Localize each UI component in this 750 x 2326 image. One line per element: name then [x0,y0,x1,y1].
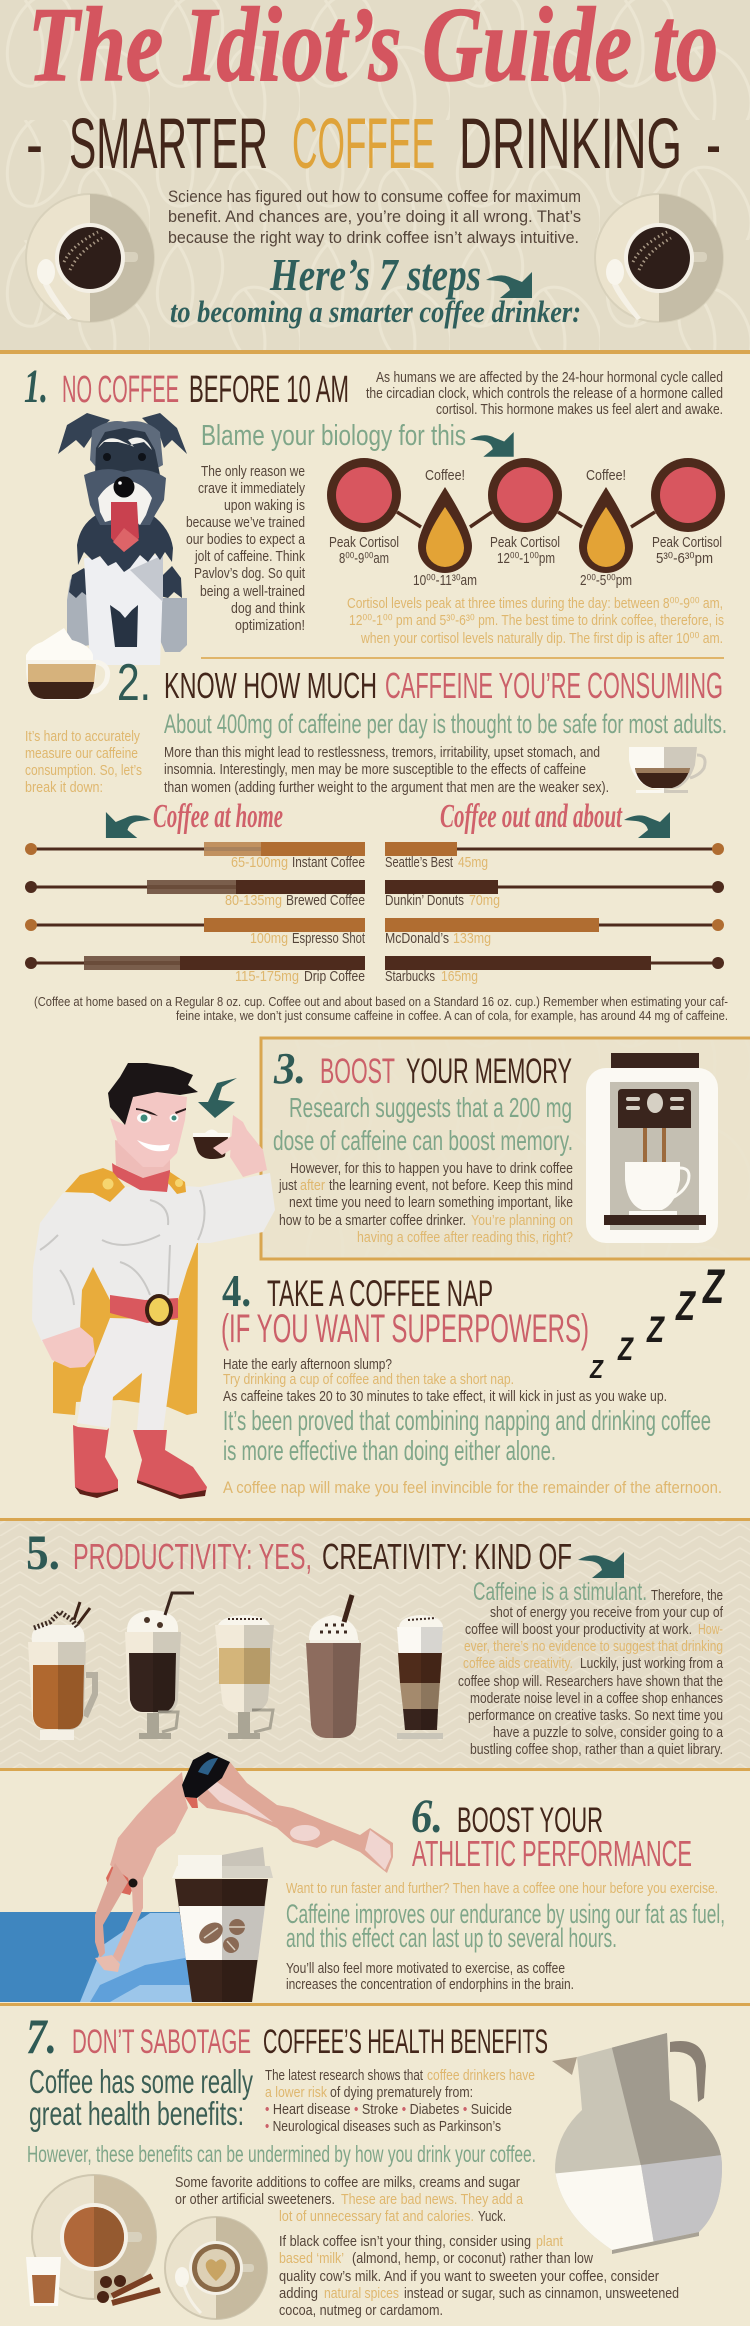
text: alternatives: instead or sugar, such as cinnamon, unsweetened [404,2285,679,2302]
text: side effects: than women (adding further weight to the argument that men are the weaker sex). [164,779,609,796]
text: measure note: It’s hard to accurately [25,728,140,745]
chart: coffee out and about bars: Starbucks [385,968,435,985]
text: alternatives: plant [536,2233,564,2250]
subheading: health benefits: Coffee has some really [29,2063,253,2100]
text: pavlov: optimization! [235,617,305,634]
text: pavlov: upon waking is [224,497,305,514]
text: additions: or other artificial sweeteners. [175,2191,335,2208]
icon: arrow [578,1552,624,1578]
heading: step 4: 4. [222,1265,251,1316]
icon: saucer with heart latte [165,2217,267,2319]
chart: coffee out and about bars: Seattle’s Best [385,854,454,871]
subheading: nap research: is more effective than doing either alone. [223,1435,556,1466]
heading: step 5: PRODUCTIVITY: YES, [73,1536,312,1577]
text: memory body [278,1160,573,1246]
heading: step 1: NO COFFEE [62,369,179,411]
heading: step 7 [26,2008,548,2064]
heading: step 6: 6. [411,1790,443,1843]
icon: sleeping z letters: Z [646,1309,665,1350]
subheading: research: Research suggests that a 200 mg [289,1092,572,1123]
text: memory body: the learning event, not before. Keep this mind [329,1177,573,1194]
text: pavlov: being a well-trained [200,583,305,600]
chart: cortisol timeline: Peak Cortisol [490,534,560,551]
chart: coffee at home bars [25,842,366,985]
illustration: pool water [0,1912,192,2002]
text: additions [175,2174,524,2225]
heading: step 4: TAKE A COFFEE NAP [267,1273,493,1314]
heading: here's 7 steps: to becoming a smarter coffee drinker: [170,294,581,329]
icon: latte glass [26,628,108,700]
hair [108,1063,198,1125]
text: additions: Yuck. [478,2208,506,2225]
icon: sleeping z letters [589,1261,725,1384]
text: pavlov: Pavlov’s dog. So quit [194,565,306,582]
chart: coffee at home bars: 100mg [250,930,288,947]
chart: cortisol timeline: Peak Cortisol [652,534,722,551]
chart: coffee at home bars: Instant Coffee [292,854,365,871]
heading: step 7: COFFEE’S HEALTH BENEFITS [263,2023,548,2061]
text: nap intro: Try drinking a cup of coffee and then take a short nap. [223,1371,514,1388]
subheading: research [273,1092,573,1156]
text: alternatives [279,2233,679,2319]
text: additions: Some favorite additions to coffee are milks, creams and sugar [175,2174,520,2191]
subtitle: - [706,105,721,184]
icon: schnauzer dog [58,413,187,665]
panel: step 5 [0,1518,750,1771]
text: measure note [25,728,142,796]
chart: coffee out and about bars: McDonald’s [385,930,449,947]
heading: step 2 [117,654,723,712]
text: stimulant: Caffeine is a stimulant. [473,1578,647,1606]
chart: coffee out and about bars: 70mg [469,892,500,909]
chart: cortisol timeline: 10⁰⁰-11³⁰am [413,572,477,589]
subtitle [26,105,721,184]
heading: blame your biology: Blame your biology for this [201,420,466,452]
text: pavlov: The only reason we [201,463,305,480]
chart: coffee at home bars: 65-100mg [231,854,288,871]
icon: sleeping z letters: Z [617,1331,634,1367]
chart: coffee at home bars: Espresso Shot [292,930,366,947]
text: stimulant: Therefore, the [651,1587,723,1604]
eyes and smile [136,1108,186,1151]
chart: coffee out and about bars [385,842,724,985]
heading: step 3: 3. [273,1044,306,1093]
epaulets [65,1168,186,1202]
icon: sleeping z letters: Z [589,1354,604,1384]
subheading: health benefits: great health benefits: [29,2095,244,2132]
text: research list: The latest research shows that [265,2067,424,2084]
heading: coffee at home: Coffee at home [153,798,283,835]
chart: coffee at home bars: 115-175mg [235,968,299,985]
icon: drink 4 [306,1595,361,1738]
text: footnote [34,994,728,1023]
text: pavlov: crave it immediately [198,480,305,497]
panel: step 1 [24,360,725,665]
chart: cortisol timeline [327,458,725,589]
heading: step 3: YOUR MEMORY [406,1052,572,1091]
text: pavlov: jolt of caffeine. Think [194,548,305,565]
text: research list: of dying prematurely from: [330,2084,473,2101]
text: memory body: how to be a smarter coffee drinker. [279,1212,466,1229]
text: memory body: having a coffee after reading this, right? [357,1229,573,1246]
icon: spices [97,2275,160,2303]
icon: arrow [486,272,532,298]
neck and face [115,1140,170,1178]
legs [77,1318,178,1432]
heading: step 6: BOOST YOUR [457,1801,603,1840]
icon: sleeping z letters: Z [675,1282,696,1329]
chart: coffee out and about bars: 165mg [441,968,478,985]
heading: step 1 [24,360,349,413]
heading: step 5 [26,1524,572,1580]
heading: step 7: 7. [26,2008,57,2064]
intro text [168,187,581,247]
icon: coffee cup left [26,194,154,322]
text: stimulant [458,1578,724,1758]
subtitle: COFFEE [292,105,435,184]
chart: coffee out and about bars: 45mg [458,854,488,871]
icon: drink 1 [28,1602,98,1740]
text: research list: a lower risk [265,2084,327,2101]
text: memory body: next time you need to learn something important, like [289,1194,573,1211]
torso and arms [32,1173,275,1342]
icon: arrow left [106,812,151,838]
text: alternatives: natural spices [324,2285,399,2302]
illustration: superhero [32,1063,275,1499]
chart: coffee out and about bars: 133mg [453,930,491,947]
heading: step 1: 1. [24,360,48,413]
text: pavlov: because we’ve trained [186,514,305,531]
heading: step 4 [221,1265,589,1351]
cape [53,1235,198,1415]
icon: sleeping z letters: Z [702,1261,725,1314]
heading: step 3: BOOST [320,1052,395,1091]
text: alternatives: (almond, hemp, or coconut) rather than low [352,2250,593,2267]
collar [112,1163,170,1192]
panel: header [0,0,750,352]
text: circadian intro [366,369,723,418]
icon: espresso machine [586,1053,718,1243]
chart: cortisol timeline: 8⁰⁰-9⁰⁰am [339,550,389,567]
heading: coffee out and about: Coffee out and about [440,798,623,835]
text: measure note: measure our caffeine [25,745,138,762]
text: side effects: insomnia. Interestingly, men may be more susceptible to the effects of caffeine [164,761,586,778]
heading: step 2: KNOW HOW MUCH [164,665,377,706]
chart: cortisol timeline: Coffee! [425,467,465,484]
subtitle: SMARTER [69,105,268,184]
illustration: diver [95,1752,393,1972]
text: pavlov: our bodies to expect a [186,531,306,548]
fist [42,1327,95,1368]
heading: step 7: DON’T SABOTAGE [72,2023,251,2061]
boots [73,1425,207,1499]
panel: step 7 [26,2008,730,2319]
subheading: endurance [286,1899,725,1953]
panel: step 6 [0,1752,725,2002]
text: side effects: More than this might lead to restlessness, tremors, irritability, upset stomach, and [164,744,600,761]
text: memory body: after [300,1177,325,1194]
chart: cortisol timeline: 2⁰⁰-5⁰⁰pm [580,572,632,589]
chart: coffee out and about bars: Dunkin’ Donuts [385,892,464,909]
text: memory body: You’re planning on [471,1212,573,1229]
subheading: nap research [223,1405,711,1466]
hand and cup [193,1115,267,1177]
chart: cortisol timeline: 5³⁰-6³⁰pm [656,550,713,567]
text: nap intro [223,1356,667,1405]
heading: step 5: 5. [26,1524,60,1580]
icon: milk glass [26,2257,61,2306]
intro text: benefit. And chances are, you’re doing it all wrong. That’s [168,207,581,226]
text: alternatives: If black coffee isn’t your thing, consider using [279,2233,531,2250]
panel: step 4 [221,1261,725,1497]
chart: coffee at home bars: 80-135mg [225,892,282,909]
panel: step 2 [25,654,728,1023]
icon: arrow [470,432,514,457]
intro text: because the right way to drink coffee isn’t always intuitive. [168,228,579,247]
text: memory body: just [278,1177,298,1194]
icon: coffee cup right [595,194,723,322]
text: alternatives: cocoa, nutmeg or cardamom. [279,2302,443,2319]
text: pavlov: dog and think [231,600,305,617]
panel: step 3 [261,1038,750,1259]
subtitle: - [26,105,43,184]
heading: step 5: CREATIVITY: KIND OF [322,1536,572,1577]
icon: arrow down [198,1078,237,1118]
subheading: health benefits [29,2063,253,2132]
icon: espresso cup [629,747,705,793]
heading: step 2: 2. [117,654,151,712]
text: measure note: break it down: [25,779,103,796]
text: endorphins [286,1960,574,1993]
heading: here's 7 steps: Here’s 7 steps [269,249,481,300]
text: additions: These are bad news. They add a [341,2191,524,2208]
text: memory body: However, for this to happen you have to drink coffee [290,1160,573,1177]
illustration: pitcher [552,2033,722,2254]
icon: arrow right [624,812,670,838]
chart: cortisol timeline: Peak Cortisol [329,534,399,551]
illustration: takeaway cup [172,1847,273,2002]
text: stimulant: How- [698,1621,723,1638]
heading: step 1: BEFORE 10 AM [189,369,349,411]
subheading: research: dose of caffeine can boost memory. [273,1125,573,1156]
text: stimulant: coffee will boost your productivity at work. [465,1621,692,1638]
chart: coffee at home bars: Brewed Coffee [286,892,365,909]
icon: drink 2 [125,1593,194,1739]
heading: here's 7 steps [170,249,581,329]
icon: drink 5 [397,1615,443,1739]
text: additions: lot of unnecessary fat and calories. [279,2208,474,2225]
icon: saucer with latte [32,2175,156,2299]
text: research list: • Neurological diseases such as Parkinson’s [265,2118,501,2135]
text: alternatives: adding [279,2285,318,2302]
text: alternatives: based ‘milk’ [279,2250,344,2267]
text: measure note: consumption. So, let’s [25,762,142,779]
text: endorphins: increases the concentration of endorphins in the brain. [286,1976,574,1993]
text: alternatives: quality cow’s milk. And if you want to sweeten your coffee, consider [279,2268,659,2285]
chart: coffee at home bars: Drip Coffee [304,968,365,985]
heading: step 6 [411,1790,692,1874]
text: endorphins: You’ll also feel more motivated to exercise, as coffee [286,1960,565,1977]
text: stimulant: coffee aids creativity. [463,1655,573,1672]
text: research list: • Heart disease • Stroke • Diabetes • Suicide [265,2101,512,2118]
belt [110,1294,178,1326]
heading: step 3 [273,1044,572,1093]
text: nap intro: Hate the early afternoon slump? [223,1356,392,1373]
text: research list: coffee drinkers have [427,2067,535,2084]
chart: cortisol timeline: Coffee! [586,467,626,484]
intro text: Science has figured out how to consume coffee for maximum [168,187,581,206]
text: cortisol note [347,595,724,647]
text: pavlov [186,463,306,634]
icon: drink 3 [215,1615,274,1739]
text: side effects [164,744,609,796]
chart: cortisol timeline: 12⁰⁰-1⁰⁰pm [497,550,555,567]
text: research list [265,2067,535,2135]
